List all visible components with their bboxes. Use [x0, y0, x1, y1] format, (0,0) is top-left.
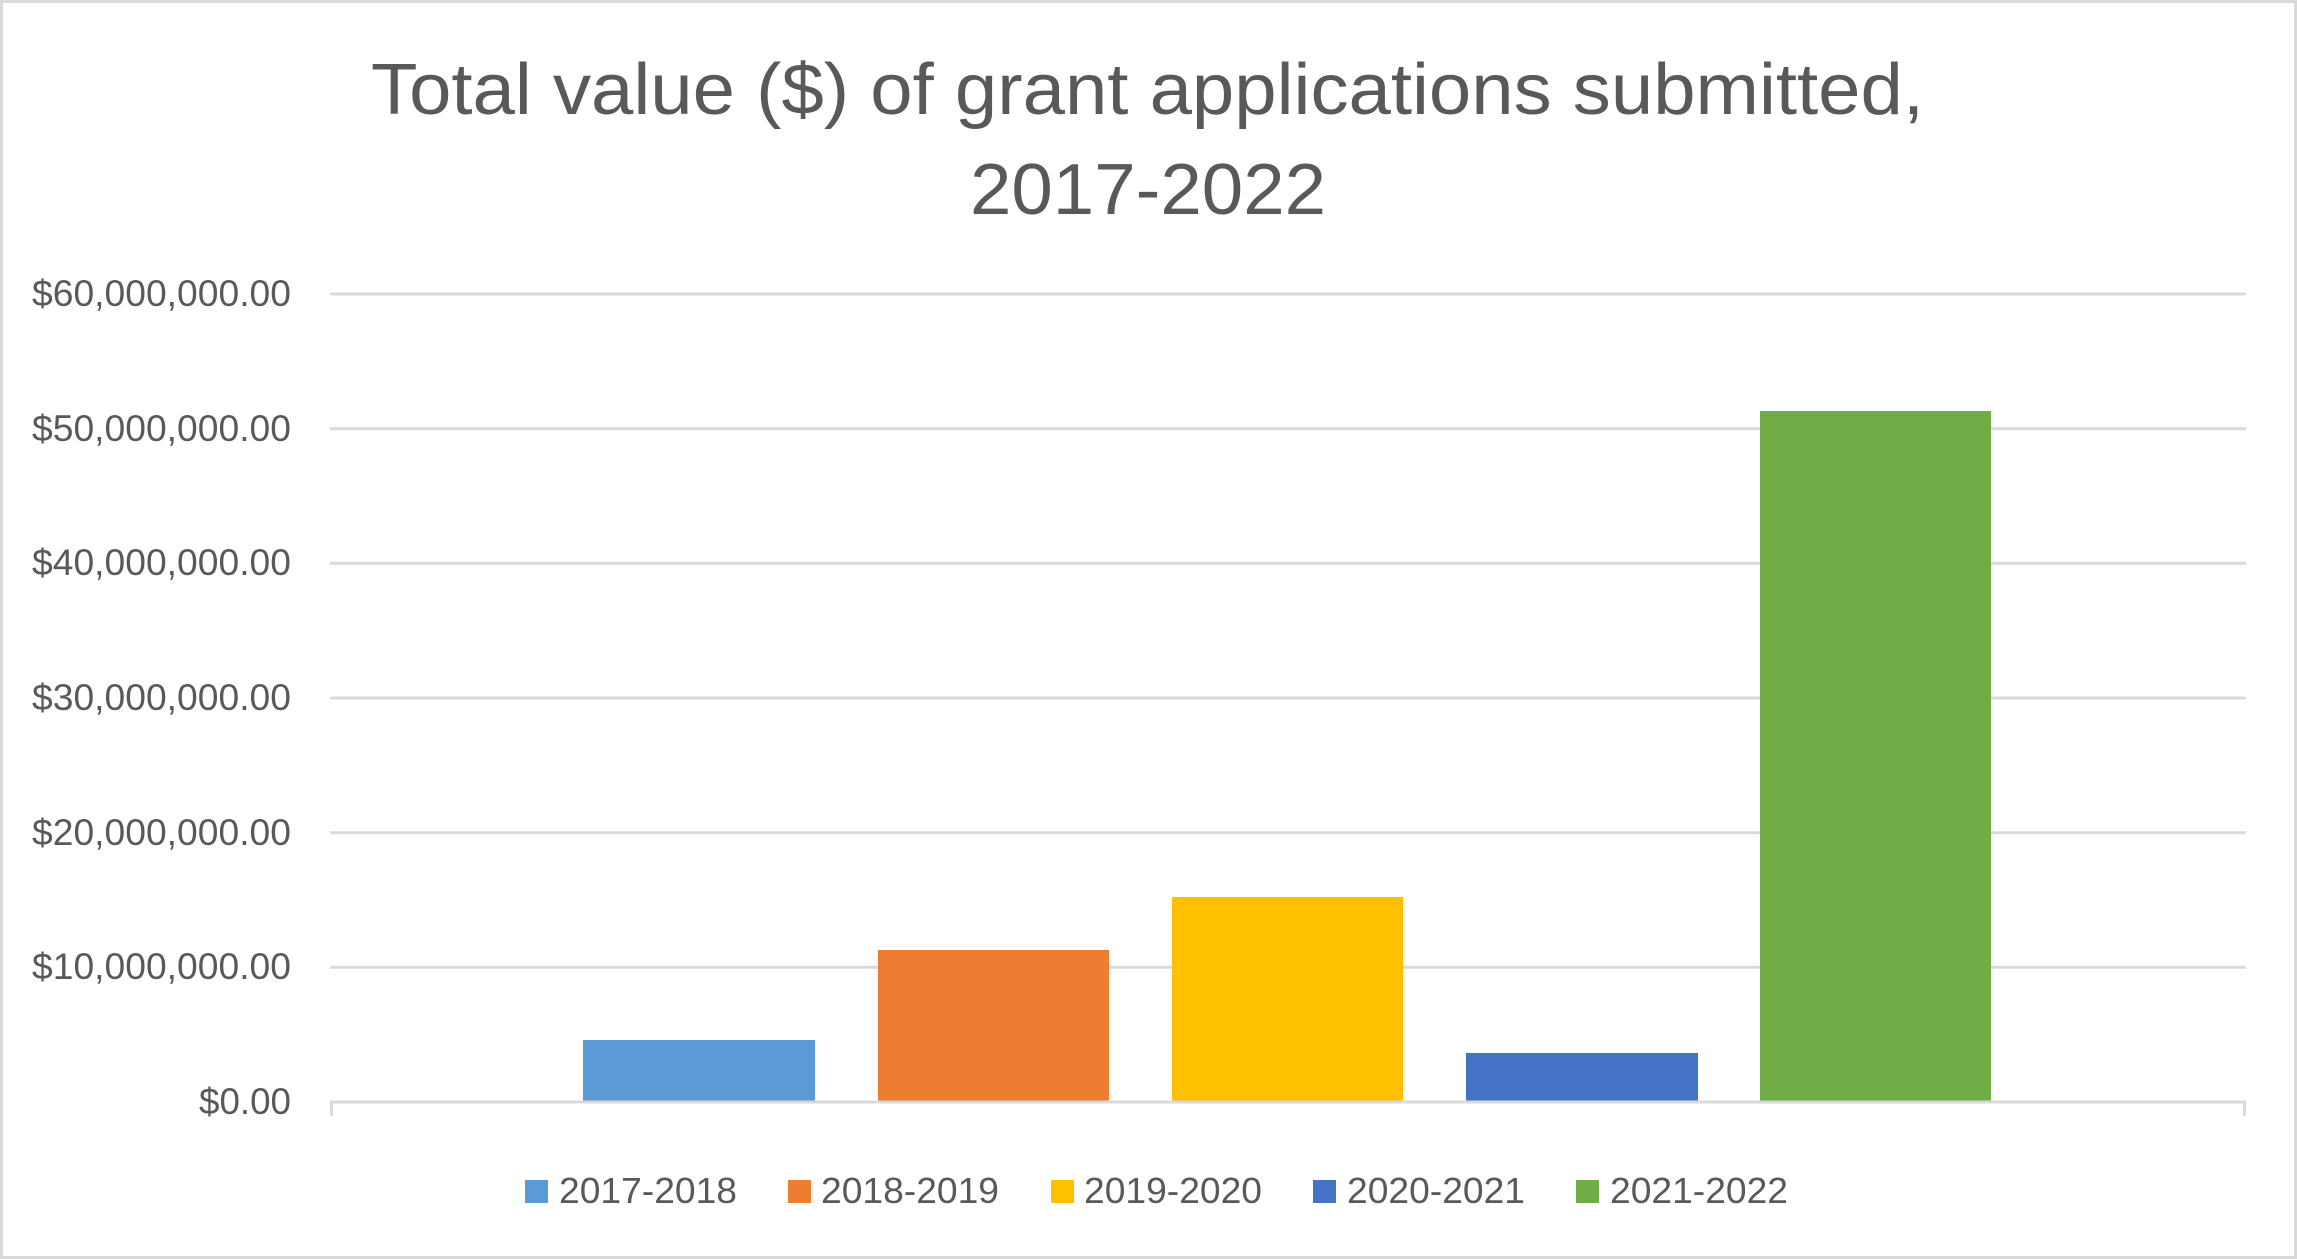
y-axis labels: $10,000,000.00: [32, 946, 291, 987]
x axis: [332, 1102, 2244, 1116]
title: 2017-2022: [970, 150, 1326, 230]
legend item: 2017-2018: 2017-2018: [559, 1170, 737, 1211]
y-axis labels: $30,000,000.00: [32, 677, 291, 718]
bar: 2021-2022: [1760, 411, 1991, 1102]
y-axis labels: $60,000,000.00: [32, 273, 291, 314]
bar: 2017-2018: [583, 1040, 815, 1102]
title: Total value ($) of grant applications submitted,: [371, 50, 1924, 130]
y-axis labels: $0.00: [199, 1081, 291, 1122]
legend: [525, 1170, 1788, 1211]
bar chart: [583, 411, 1991, 1102]
legend item: 2021-2022: 2021-2022: [1610, 1170, 1788, 1211]
y-axis labels: $20,000,000.00: [32, 812, 291, 853]
y-axis labels: [32, 273, 291, 1122]
bar: 2018-2019: [878, 950, 1109, 1102]
y-axis labels: $50,000,000.00: [32, 408, 291, 449]
bar: 2019-2020: [1172, 897, 1403, 1102]
legend item: 2020-2021: 2020-2021: [1347, 1170, 1525, 1211]
legend item: 2019-2020: 2019-2020: [1084, 1170, 1262, 1211]
legend item: 2018-2019: 2018-2019: [821, 1170, 999, 1211]
bar: 2020-2021: [1466, 1053, 1698, 1102]
title: [371, 50, 1924, 230]
y-axis labels: $40,000,000.00: [32, 542, 291, 583]
